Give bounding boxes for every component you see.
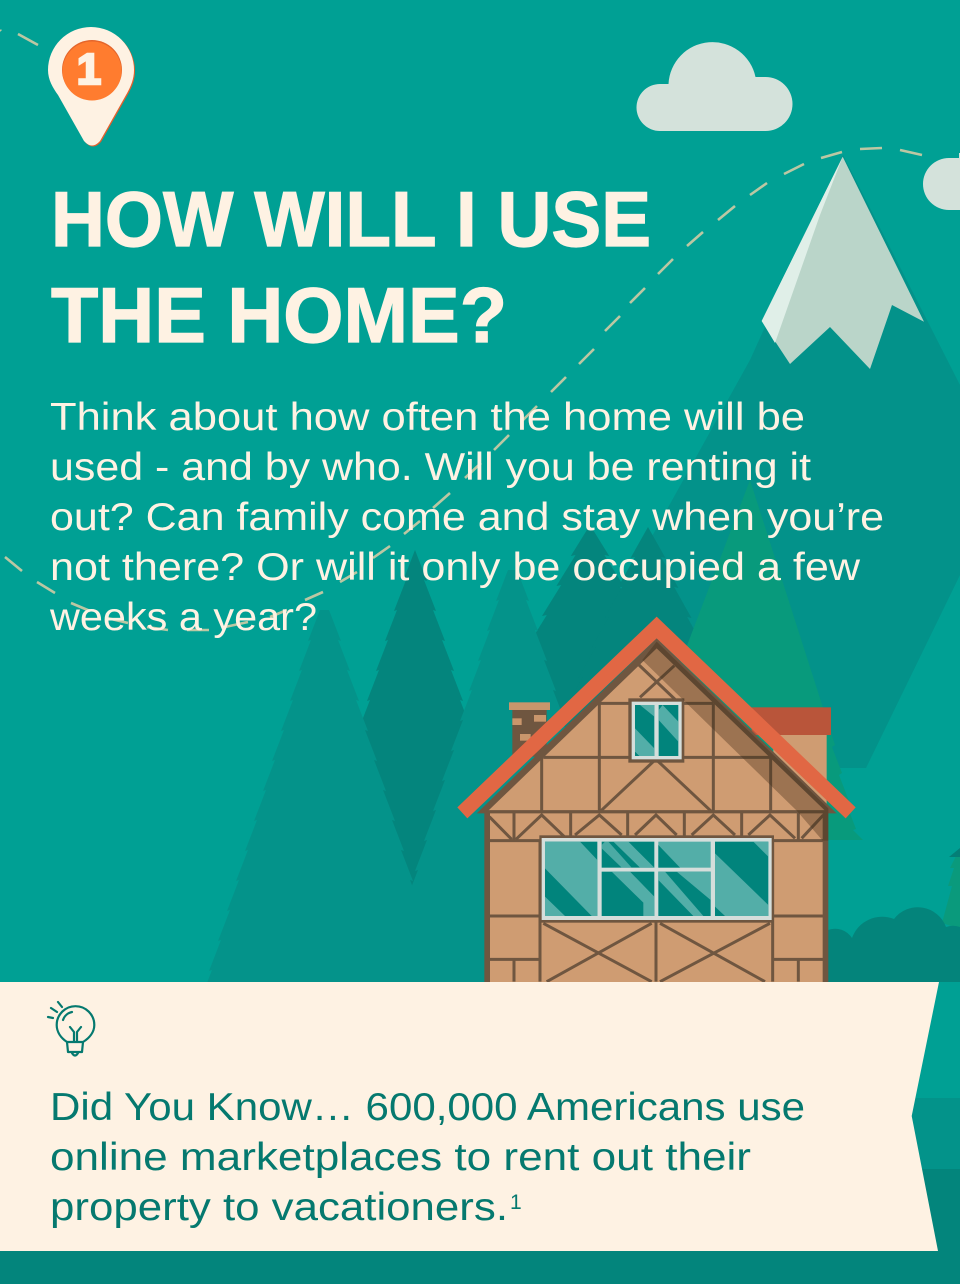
tree: far right (942, 848, 960, 929)
callout text: online marketplaces to rent out their (50, 1136, 751, 1179)
callout text: Did You Know… 600,000 Americans use (50, 1086, 805, 1129)
tree: dark back tree 1 (277, 550, 553, 1001)
body text: weeks a year? (49, 596, 317, 639)
icon: location pin with number 1 (48, 27, 135, 146)
body text: Think about how often the home will be (50, 396, 805, 439)
callout text: 1 (510, 1191, 522, 1214)
icon: location pin with number 1: 1 (77, 45, 101, 94)
heading (51, 175, 651, 359)
cloud: large (636, 42, 792, 131)
roof shadow (642, 642, 828, 841)
callout text (50, 1086, 805, 1229)
cloud: right edge (923, 153, 960, 210)
walls (477, 638, 837, 982)
house (457, 617, 856, 982)
body text: not there? Or will it only be occupied a few (50, 546, 861, 589)
dashed flight path (0, 30, 922, 630)
tree: green behind house (613, 480, 863, 840)
bushes (828, 907, 960, 982)
body text (49, 396, 884, 639)
callout text: property to vacationers. (50, 1186, 508, 1229)
side extension (752, 707, 831, 815)
heading: THE HOME? (51, 271, 507, 359)
small attic window (628, 698, 684, 763)
tree: front left (191, 610, 458, 1031)
heading: HOW WILL I USE (51, 175, 651, 263)
mountain (600, 155, 960, 768)
large window (539, 835, 774, 923)
chimney (509, 702, 550, 757)
callout banner (0, 982, 939, 1251)
tree: front centre (379, 570, 646, 991)
tree: dark back tree 3 (448, 527, 848, 978)
scene: landscape (0, 30, 960, 1031)
tree: dark back tree 2 (369, 525, 811, 976)
body text: out? Can family come and stay when you’re (50, 496, 884, 539)
icon: light bulb (48, 1002, 94, 1056)
roof (457, 617, 856, 818)
timber framing (487, 665, 825, 982)
body text: used - and by who. Will you be renting it (50, 446, 811, 489)
callout banner background strips (0, 982, 960, 1284)
